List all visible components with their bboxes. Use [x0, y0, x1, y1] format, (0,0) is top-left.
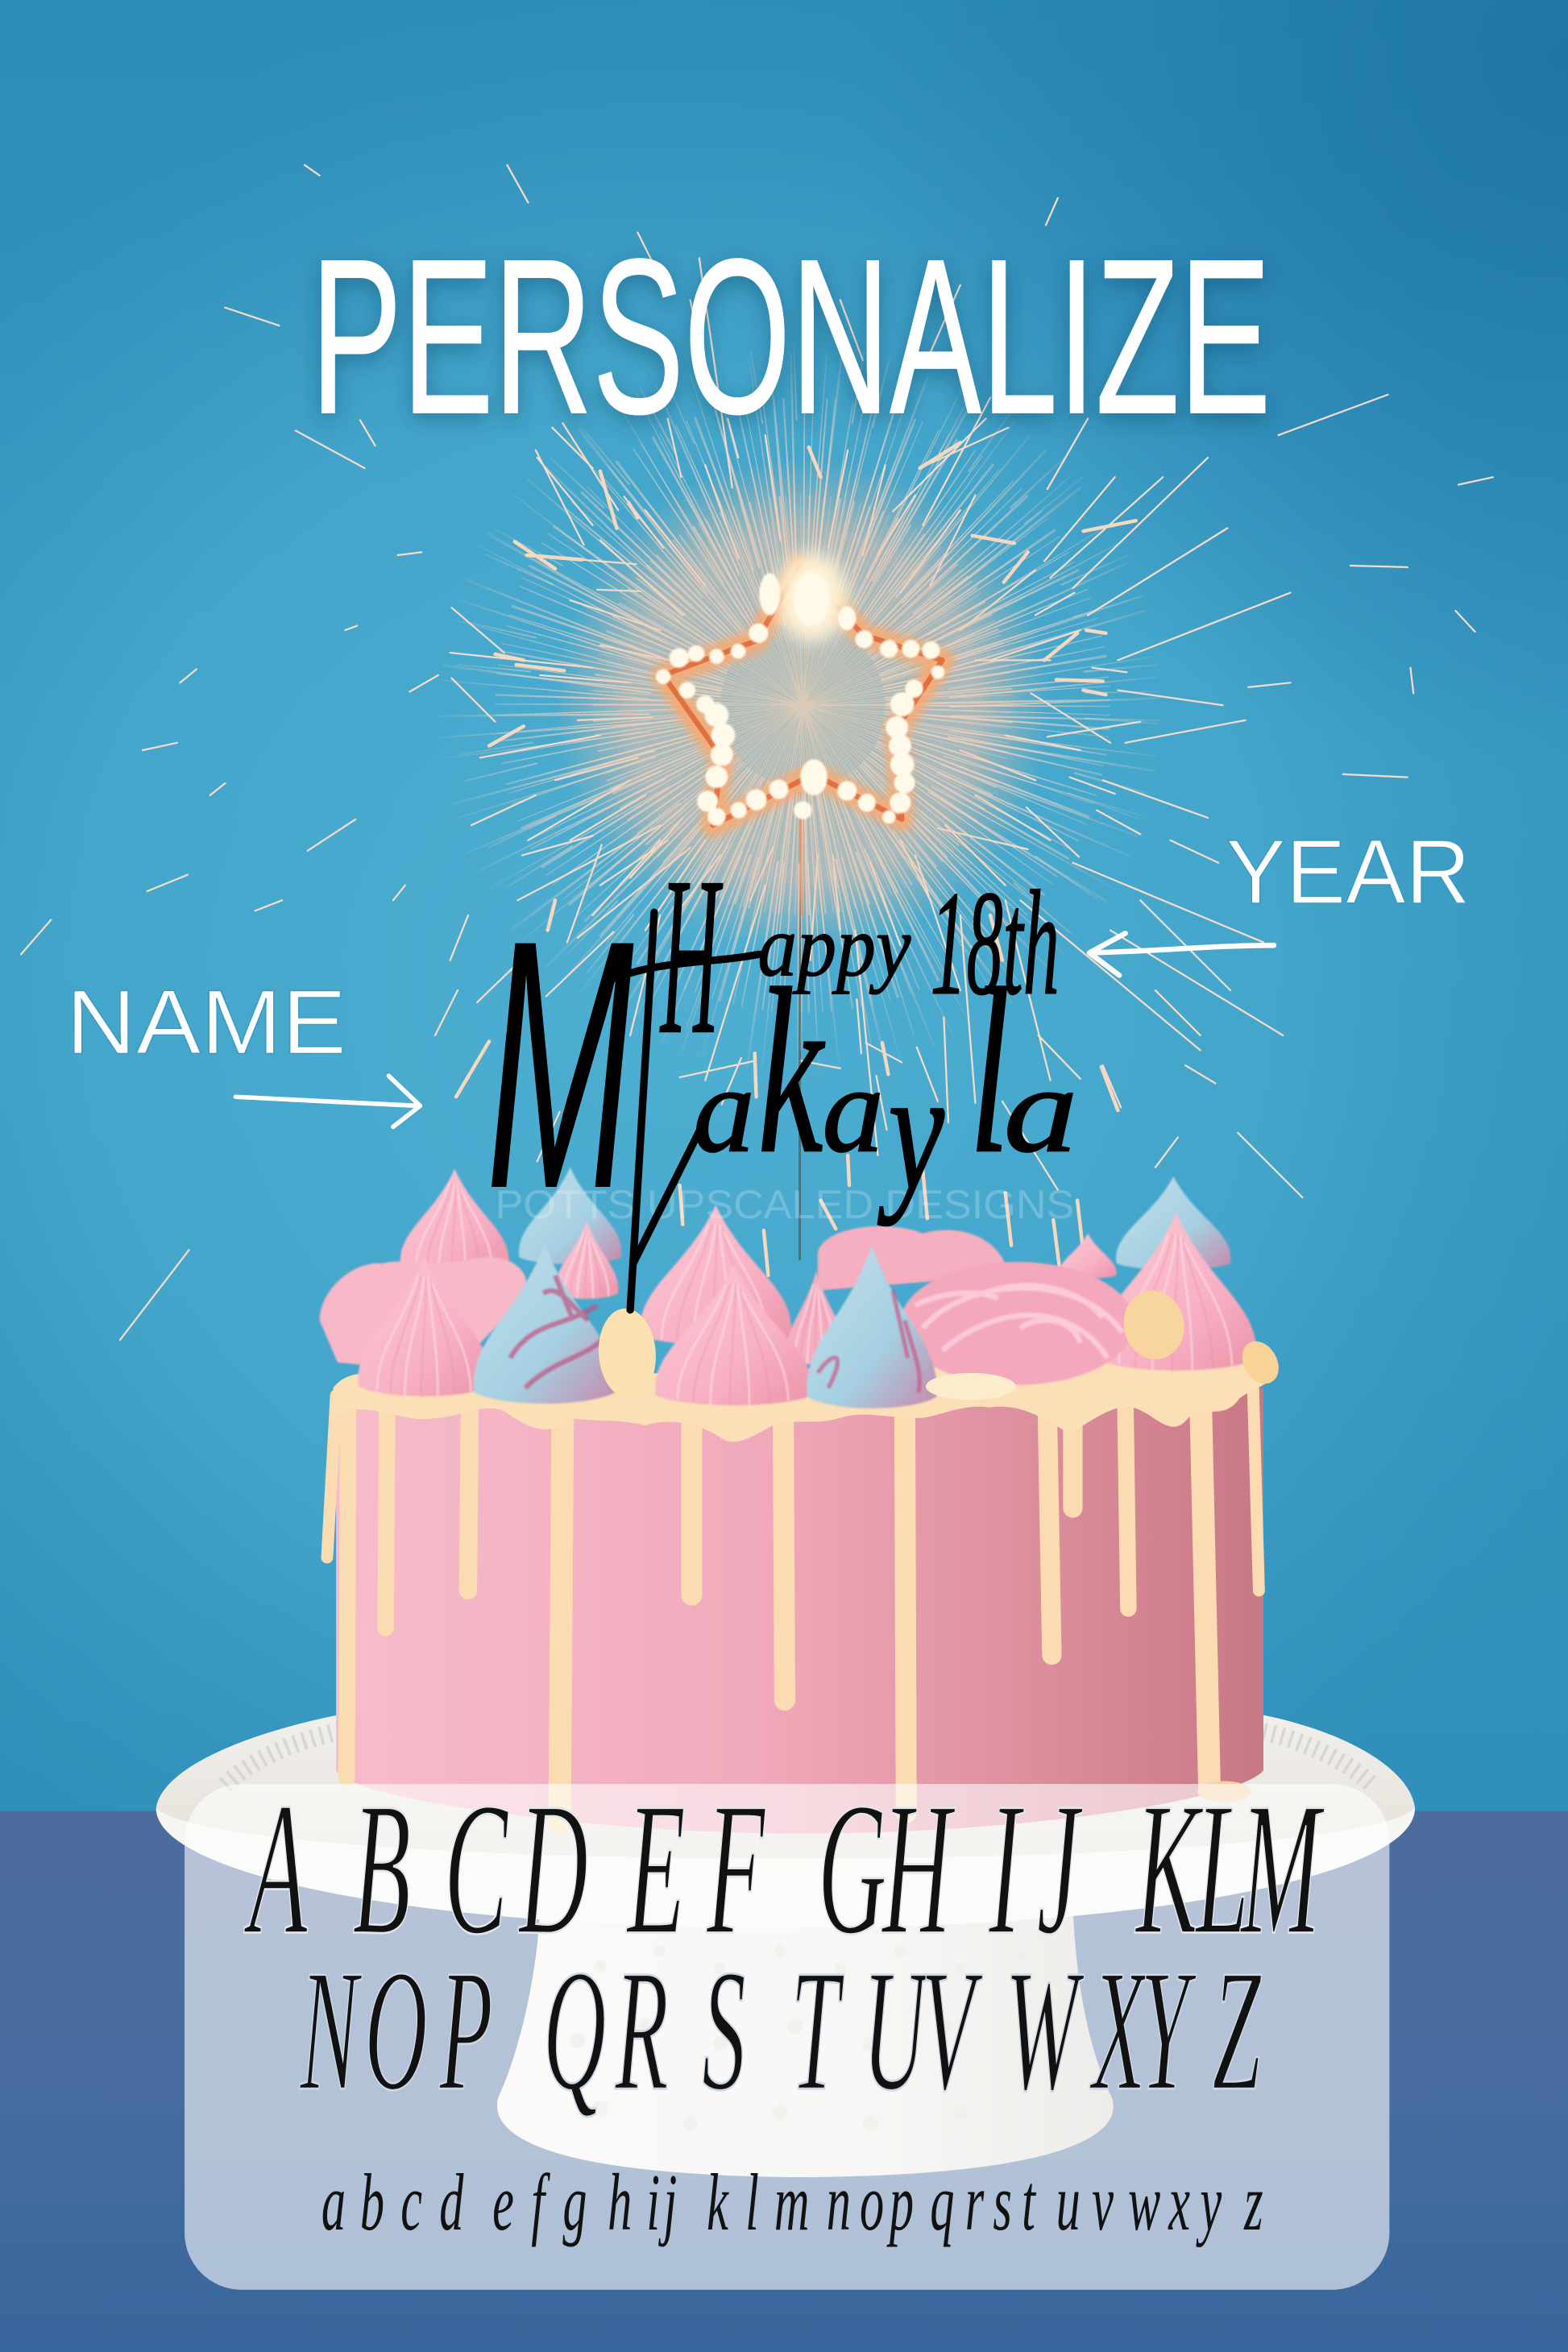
- topper word: Makayla: k: [757, 940, 826, 1202]
- watermark: POTTS UPSCALED DESIGNS: [496, 1181, 1074, 1227]
- scattered sparks: [21, 165, 1493, 1340]
- background: table surface: [0, 1811, 1568, 2352]
- topper word: Happy: appy: [757, 898, 911, 994]
- stand foot: [497, 1906, 1114, 2177]
- topper stake: [616, 912, 759, 1310]
- star orange glow: [663, 567, 942, 825]
- topper word: Makayla: [486, 866, 1077, 1263]
- stand foot texture: [570, 1944, 1028, 2130]
- star hot dots: [656, 571, 944, 826]
- topper word: Makayla: M: [486, 866, 636, 1263]
- background: blue wall: [0, 0, 1568, 1815]
- sparkler star: [555, 458, 1051, 952]
- big pink meringue: [641, 1205, 791, 1346]
- back rosette: [818, 1226, 1008, 1290]
- cream drips: [327, 1380, 1259, 1823]
- star red wire: [663, 567, 942, 825]
- panel background: [185, 1784, 1389, 2290]
- topper word: Makayla: l: [969, 940, 1010, 1202]
- uppercase alphabet row 1: ABCDEFGHIJKLM: [243, 1764, 1325, 1974]
- almonds: [595, 1285, 1286, 1400]
- stand plate rim pattern: [225, 1732, 1373, 1786]
- topper word: Makayla: a: [822, 1042, 884, 1178]
- cake topper: Happy 18th Makayla: [486, 830, 1077, 1310]
- lowercase alphabet row: abcdefghijklmnopqrstuvwxyz: [321, 2157, 1263, 2247]
- sparkler stick: [800, 818, 801, 1260]
- cream pool at stand: [1197, 1781, 1251, 1802]
- meringue front row: [359, 1205, 1256, 1408]
- label: year: YEAR: [1226, 821, 1471, 923]
- topper word: Happy: [659, 830, 911, 1083]
- star glow halo: [555, 458, 1051, 952]
- front centre meringue: [655, 1265, 812, 1405]
- topper word: Makayla: y: [877, 1034, 944, 1226]
- cream top band: [333, 1355, 1279, 1441]
- cake topper: Happy 18th Makayla: 18th: [931, 861, 1060, 1027]
- label: name: NAME: [66, 971, 346, 1073]
- stand plate top: [156, 1715, 1415, 1859]
- star top flare: [776, 552, 848, 642]
- topper word: Happy: H: [659, 830, 724, 1083]
- topper word: Makayla: a: [693, 1042, 755, 1178]
- panel: alphabet: [185, 1764, 1389, 2290]
- cake stand: [156, 1715, 1415, 2177]
- swirled blue meringue right: [807, 1246, 937, 1408]
- swirled blue meringue left: [474, 1244, 616, 1404]
- topper word: Makayla: a: [1004, 1042, 1077, 1178]
- arrow: year: [1089, 933, 1274, 975]
- front left meringue: [359, 1256, 491, 1396]
- rosette: [900, 1262, 1135, 1385]
- right meringue: [1097, 1213, 1256, 1371]
- sparkler burst rays: [492, 383, 1122, 1013]
- uppercase alphabet row 2: NOPQRSTUVWXYZ: [299, 1934, 1262, 2126]
- arrow: name: [235, 1076, 420, 1127]
- stand plate underside: [156, 1808, 1415, 1928]
- meringue back row: [320, 1168, 1230, 1373]
- cake body: [336, 1388, 1263, 1834]
